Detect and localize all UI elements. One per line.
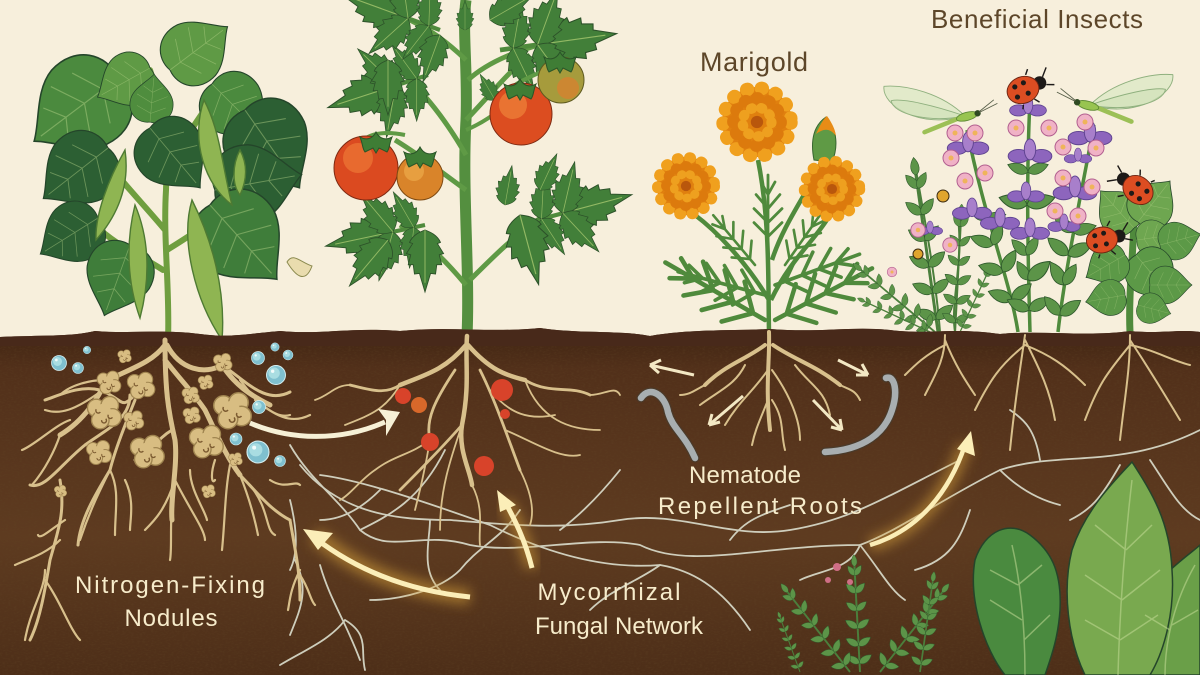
- arrow: fungal flow to nodules: [303, 529, 470, 597]
- label: nitrogen-fixing nodules: Nitrogen-Fixing: [75, 572, 265, 599]
- soil cross-section: [0, 328, 1200, 675]
- label: mycorrhizal fungal network: Mycorrhizal: [538, 579, 680, 606]
- tomato roots with red fruits of nutrients: [315, 336, 620, 545]
- arrow: fungal flow to tomato: [497, 490, 532, 568]
- plant: large spinach leaves bottom right: [973, 462, 1200, 675]
- plant: tomato stem and foliage: [311, 0, 646, 336]
- label: nematode repellent roots: Nematode: [689, 462, 801, 489]
- label: nematode repellent roots: [658, 462, 862, 520]
- label: nematode repellent roots: Repellent Roots: [658, 493, 862, 520]
- marigold roots: [680, 332, 860, 450]
- marigold repellent arrows: [650, 360, 868, 430]
- nematode worms: [641, 378, 895, 458]
- plant: lavender spikes with flowers: [943, 96, 1112, 332]
- insects: lacewings and ladybugs: [884, 62, 1173, 260]
- label: nitrogen-fixing nodules: [75, 572, 265, 632]
- plant: bean with pods: [6, 1, 334, 340]
- plant: basil: [1076, 167, 1200, 332]
- label: Beneficial Insects: Beneficial Insects: [931, 4, 1143, 34]
- label: nitrogen-fixing nodules: Nodules: [124, 605, 218, 632]
- plant: small herb bottom centre: [770, 554, 960, 675]
- label: Marigold: Marigold: [700, 47, 808, 77]
- fungal network: [280, 410, 1200, 670]
- bean roots and nodules: [15, 340, 315, 640]
- arrow: nitrogen transfer to tomato: [250, 409, 400, 436]
- plant: marigold: [654, 87, 882, 340]
- label: mycorrhizal fungal network: [535, 579, 704, 640]
- insect plant roots: [905, 335, 1190, 450]
- soil surface overlap: [0, 328, 1200, 346]
- label: mycorrhizal fungal network: Fungal Network: [535, 613, 704, 640]
- tomatoes: [334, 52, 584, 200]
- plant: thyme on the left of the insect bed: [845, 155, 1000, 342]
- arrow: fungal flow to insect plants: [870, 431, 975, 545]
